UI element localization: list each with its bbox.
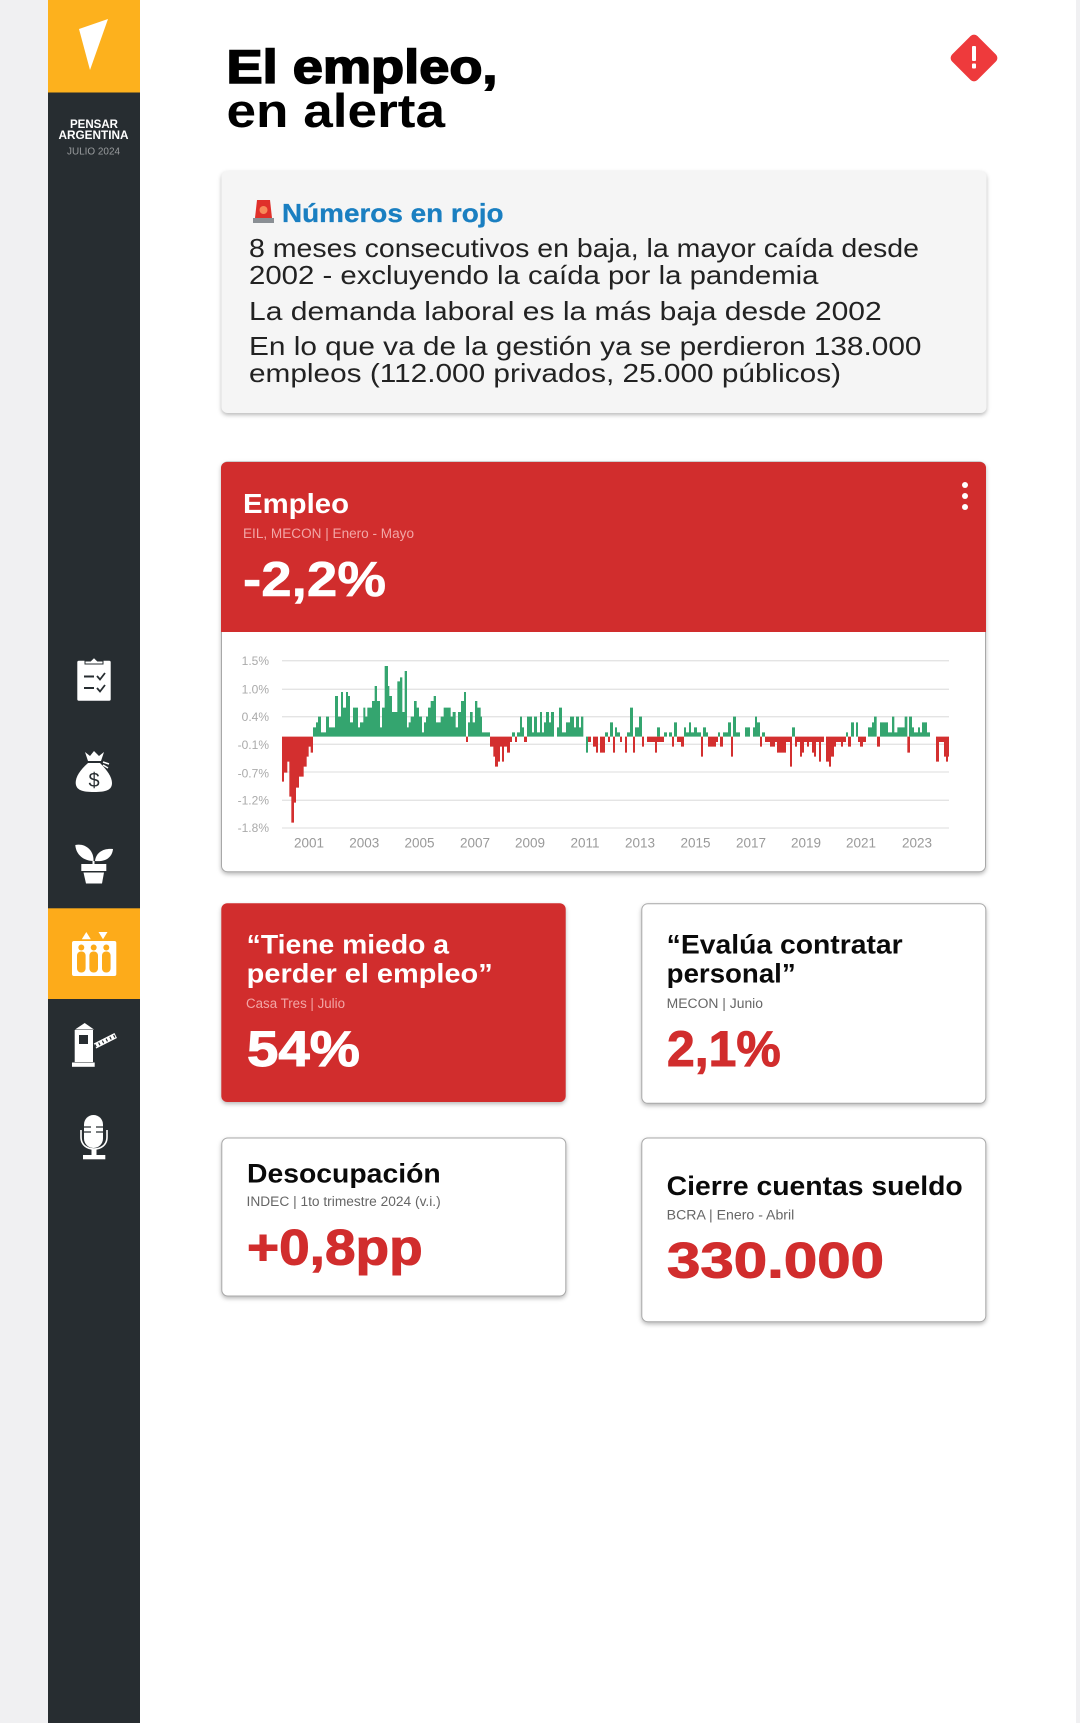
x axis labels: 2021 [846,835,876,850]
card: tiene miedo: perder el empleo” [247,958,493,988]
card: evalua contratar: 2,1% [667,1021,781,1077]
card: evalua contratar: MECON | Junio [667,996,763,1011]
x axis labels: 2017 [736,835,766,850]
bars 2012 to 2024 [600,708,949,767]
panel: numeros en rojo [222,171,986,413]
x axis labels: 2005 [404,835,435,850]
card: tiene miedo: Casa Tres | Julio [246,996,345,1011]
icon: money bag [76,751,112,792]
title [226,40,498,137]
card: evalua contratar: “Evalúa contratar [667,929,903,959]
icon: siren [253,200,274,223]
body text: 2002 - excluyendo la caída por la pandemia [249,260,819,290]
brand label [58,119,128,157]
y axis labels: -0.7% [238,766,269,780]
x axis labels [294,835,932,850]
card: cierre cuentas sueldo: Cierre cuentas sueldo [667,1171,963,1201]
card: desocupacion: Desocupación [247,1158,441,1188]
title: El empleo, [226,40,498,93]
x axis labels: 2007 [460,835,490,850]
body text: La demanda laboral es la más baja desde 2002 [249,296,882,326]
x axis labels: 2001 [294,835,324,850]
body text: En lo que va de la gestión ya se perdieron 138.000 [249,331,922,361]
y axis labels: 1.5% [242,654,269,668]
body text: empleos (112.000 privados, 25.000 públicos) [249,358,841,388]
x axis labels: 2009 [515,835,545,850]
card header: Empleo [243,488,349,519]
icon: menu dots [962,482,968,510]
card: tiene miedo: 54% [247,1021,360,1077]
panel: empleo chart card [221,462,986,872]
y axis labels: -1.2% [238,793,269,807]
card: cierre cuentas sueldo: 330.000 [667,1232,884,1288]
brand label: ARGENTINA [58,130,128,142]
card: desocupacion: +0,8pp [247,1219,423,1275]
card: desocupacion: INDEC | 1to trimestre 2024 (v.i.) [246,1194,441,1209]
icon: money bag: $ [88,770,100,792]
y axis labels [238,654,269,835]
icon: microphone [81,1115,107,1159]
icon: plant [75,845,113,884]
active nav item [48,908,140,999]
y axis labels: -1.8% [238,821,269,835]
card header: -2,2% [243,553,386,607]
card header: EIL, MECON | Enero - Mayo [243,526,414,541]
card: evalua contratar: personal” [667,958,796,988]
brand label: JULIO 2024 [67,145,120,157]
icon: elevator [72,932,116,976]
x axis labels: 2011 [570,835,600,850]
card: tiene miedo [221,903,566,1102]
panel heading: Números en rojo [282,198,504,228]
x axis labels: 2023 [902,835,932,850]
title: en alerta [226,84,446,137]
card: evalua contratar [642,904,986,1103]
logo block [48,0,140,92]
body text [249,233,922,388]
card: tiene miedo: “Tiene miedo a [247,929,450,959]
y axis labels: 1.0% [242,682,269,696]
card header [221,462,986,632]
card: desocupacion [222,1138,566,1296]
x axis labels: 2015 [680,835,711,850]
x axis labels: 2013 [625,835,655,850]
sidebar [48,0,140,1723]
y axis labels: -0.1% [238,738,269,752]
body text: 8 meses consecutivos en baja, la mayor caída desde [249,233,919,263]
card: cierre cuentas sueldo [642,1138,986,1322]
bars 2000 to 2011 [282,666,598,823]
icon: toll barrier [72,1023,116,1067]
brand label: PENSAR [70,119,119,131]
bar chart [238,654,949,850]
x axis labels: 2019 [791,835,821,850]
icon: alert diamond [949,33,999,83]
icon: clipboard [77,658,111,701]
card: cierre cuentas sueldo: BCRA | Enero - Abril [667,1207,794,1222]
x axis labels: 2003 [349,835,379,850]
y axis labels: 0.4% [242,710,269,724]
